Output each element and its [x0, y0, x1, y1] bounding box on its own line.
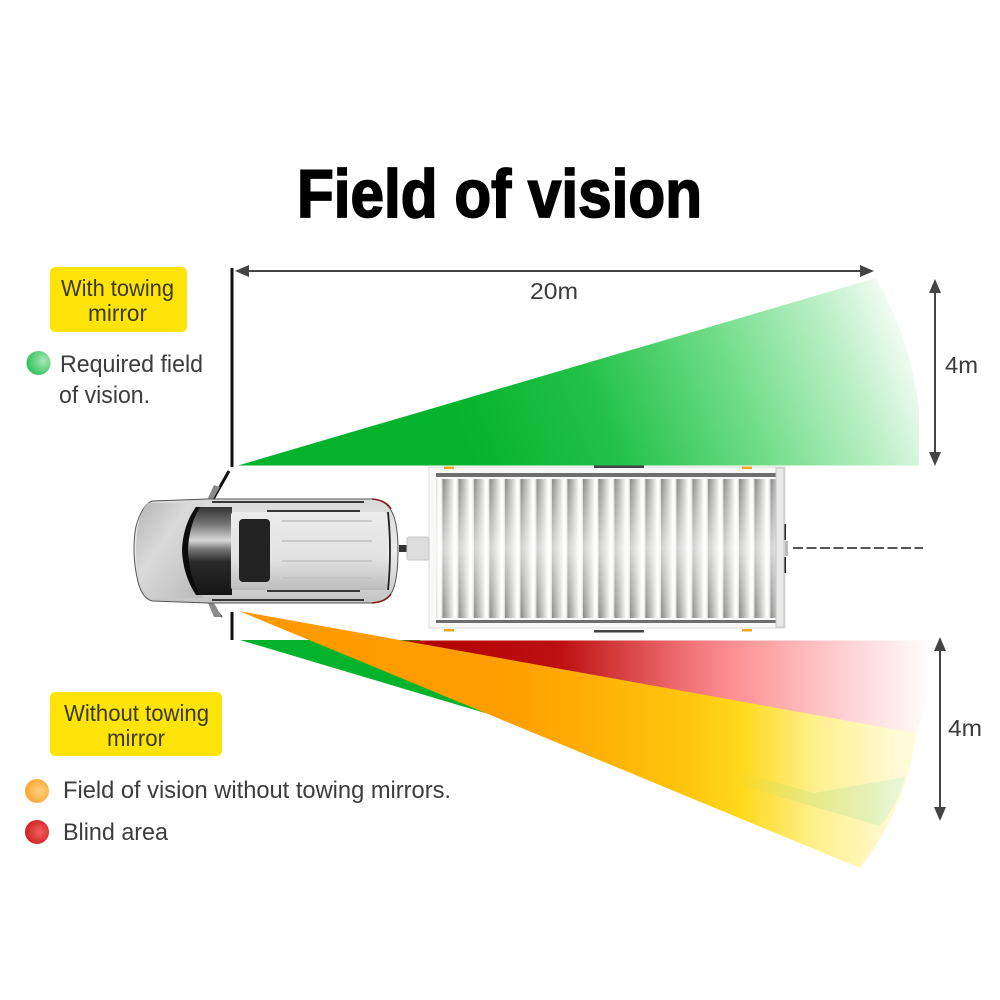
- hood: [136, 503, 205, 598]
- label: with towing mirror: With towing: [61, 275, 174, 301]
- wedge: field of vision without towing mirrors: [239, 611, 916, 868]
- dimension: upper 4m: [929, 279, 978, 466]
- legend: blind area: Blind area: [63, 819, 169, 846]
- label: with towing mirror: mirror: [88, 300, 147, 326]
- sunroof: [239, 519, 270, 582]
- label: without towing mirror: [50, 692, 222, 756]
- dimension: 20m: [235, 265, 874, 304]
- mirrors: [208, 471, 229, 617]
- label: with towing mirror: [50, 267, 187, 332]
- dimension: lower 4m: [934, 637, 982, 821]
- car body: [134, 499, 398, 603]
- hitch: [399, 537, 429, 560]
- legend: required field of vision: [26, 351, 203, 409]
- trailer: [429, 466, 788, 632]
- dimension: upper 4m: 4m: [945, 352, 978, 378]
- wedge: required field of vision, lower: [240, 640, 485, 713]
- label: without towing mirror: Without towing: [64, 700, 209, 726]
- windshield dark band: [182, 507, 200, 595]
- trailer slats: [436, 479, 776, 618]
- legend: required field of vision: of vision.: [59, 382, 150, 409]
- wedge: required field of vision, upper: [238, 278, 919, 466]
- tail lights: [372, 499, 391, 603]
- title: Field of vision: [297, 156, 702, 232]
- roof rails: [212, 502, 390, 600]
- dimension: lower 4m: 4m: [948, 715, 982, 741]
- dimension: 20m: 20m: [530, 278, 578, 304]
- reference line: upper: [230, 268, 234, 467]
- wedge: faded required field overlap: [739, 772, 905, 826]
- windshield: [182, 507, 232, 595]
- roof lines: [282, 521, 372, 578]
- reference line: lower: [230, 612, 234, 640]
- label: without towing mirror: mirror: [107, 725, 165, 751]
- dashed centre line: [793, 547, 923, 549]
- car: [134, 471, 398, 617]
- legend: field of vision without towing mirrors: Field of vision without towing mirrors.: [63, 777, 451, 804]
- legend: required field of vision: Required field: [60, 351, 203, 378]
- roof: [231, 512, 387, 590]
- wedge: blind area: [400, 640, 932, 734]
